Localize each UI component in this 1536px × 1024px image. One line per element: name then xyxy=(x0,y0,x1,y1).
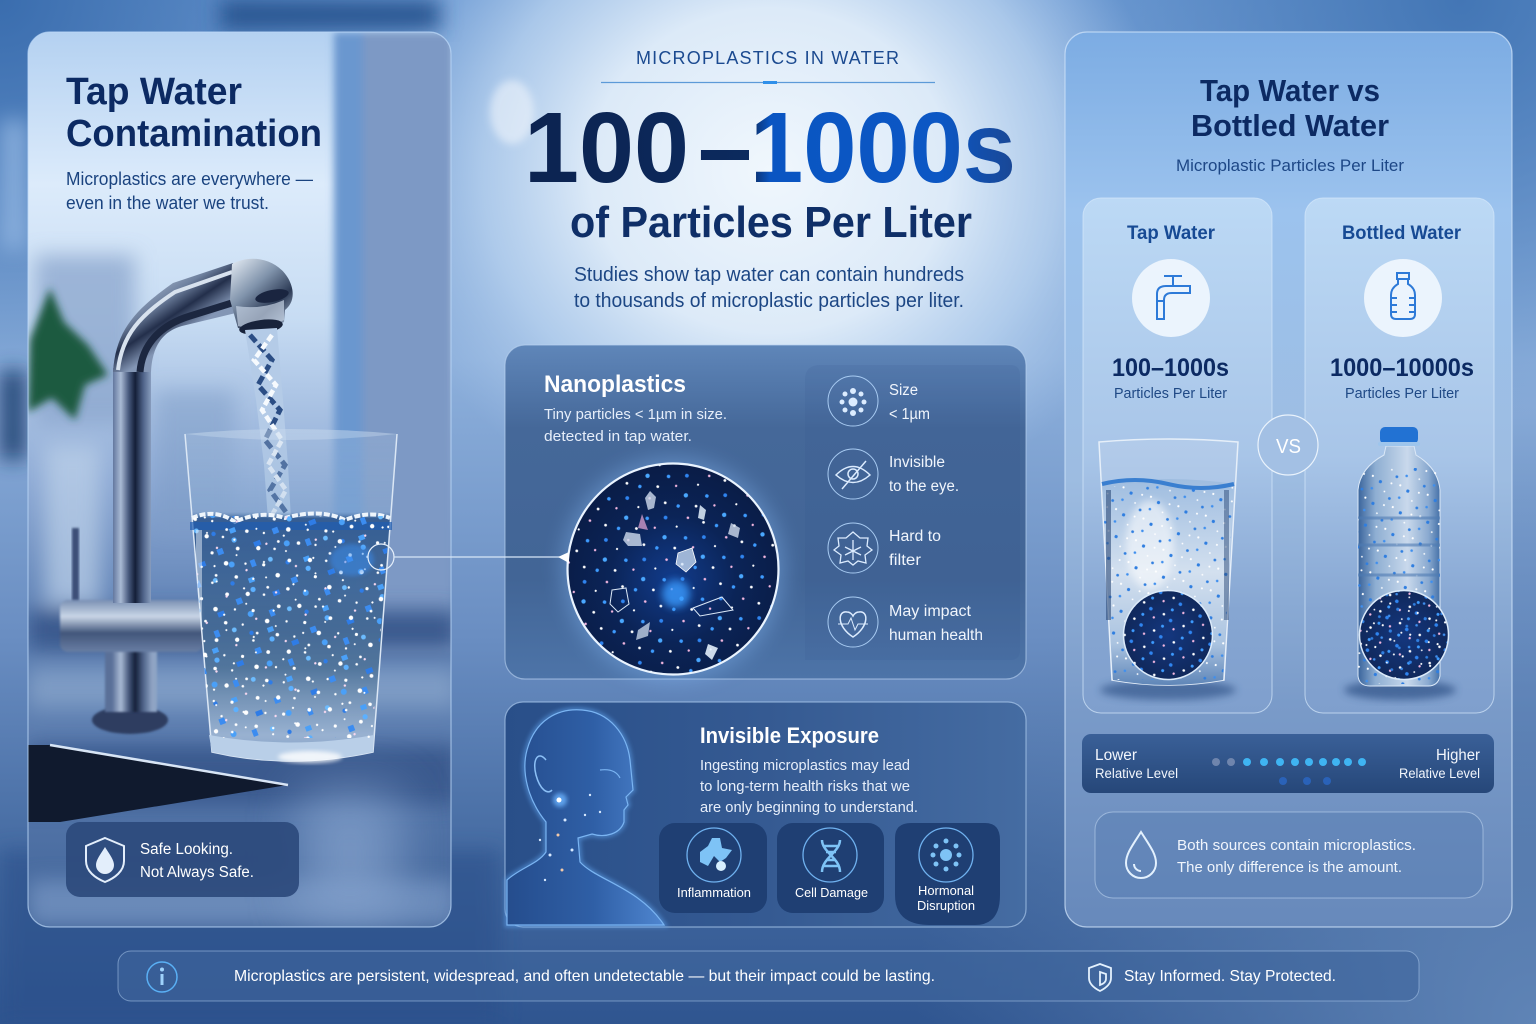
icon: tap xyxy=(1132,259,1210,337)
human head figure xyxy=(507,710,664,925)
intro text: to thousands of microplastic particles per liter. xyxy=(574,290,964,312)
card: inflammation xyxy=(659,823,767,913)
heading: Invisible Exposure xyxy=(700,723,879,748)
higher label xyxy=(1399,747,1480,781)
glass illustration xyxy=(1099,439,1238,700)
faucet xyxy=(60,259,293,734)
intro text xyxy=(574,264,964,312)
card: tap water xyxy=(1083,198,1272,713)
footer tagline: Stay Informed. Stay Protected. xyxy=(1124,968,1336,985)
lower label: Lower xyxy=(1095,747,1137,764)
icon: filter xyxy=(828,523,878,573)
VS badge xyxy=(1258,415,1318,475)
card: bottled water xyxy=(1305,198,1494,713)
label: invisible: to the eye. xyxy=(889,478,959,495)
label: size: Size xyxy=(889,382,918,399)
heading: Tap Water vs xyxy=(1200,73,1380,108)
icon: drop xyxy=(1126,832,1156,878)
kitchen photo scene xyxy=(28,32,458,926)
headline number xyxy=(524,92,1016,204)
description: detected in tap water. xyxy=(544,428,692,445)
icon: shield with drop xyxy=(86,838,124,882)
sink xyxy=(28,745,288,822)
card: bottled water: 1000–10000s xyxy=(1330,354,1474,382)
card: bottled water: Particles Per Liter xyxy=(1345,386,1459,402)
card: tap water: 100–1000s xyxy=(1112,354,1229,382)
note: both sources xyxy=(1095,812,1483,898)
description xyxy=(544,406,727,445)
subheading: Microplastics are everywhere — xyxy=(66,169,313,189)
card: bottled water: Bottled Water xyxy=(1342,223,1462,244)
subheading: even in the water we trust. xyxy=(66,193,269,213)
heading: Bottled Water xyxy=(1191,108,1389,143)
eyebrow: MICROPLASTICS IN WATER xyxy=(636,48,899,68)
note text: The only difference is the amount. xyxy=(1177,859,1402,876)
badge text: Safe Looking. xyxy=(140,841,233,858)
heading: Nanoplastics xyxy=(544,371,686,398)
label: may impact: human health xyxy=(889,627,983,644)
headline number: 100 xyxy=(524,92,689,204)
label: hard to filter: filter xyxy=(889,552,921,569)
card: cell damage: Cell Damage xyxy=(795,885,868,900)
level dots xyxy=(1212,758,1366,785)
card: inflammation: Inflammation xyxy=(677,885,751,900)
badge text: Not Always Safe. xyxy=(140,864,254,881)
card: tap water: Particles Per Liter xyxy=(1114,386,1227,402)
subheading: Microplastic Particles Per Liter xyxy=(1176,156,1404,175)
label: hard to filter xyxy=(889,528,941,569)
bottle illustration xyxy=(1344,427,1456,700)
footer bar xyxy=(118,951,1419,1001)
water stream xyxy=(245,328,291,520)
panel: tap water contamination xyxy=(28,32,458,927)
magnified particles circle xyxy=(560,457,786,681)
note text xyxy=(1177,837,1416,876)
feature list panel xyxy=(805,365,1020,660)
badge text xyxy=(140,841,254,881)
label: size xyxy=(889,382,930,423)
panel: tap vs bottled xyxy=(1065,32,1512,927)
description xyxy=(700,758,918,816)
label: size: < 1µm xyxy=(889,406,930,423)
headline unit: of Particles Per Liter xyxy=(570,198,972,247)
card: hormonal disruption: Hormonal xyxy=(918,883,974,898)
VS badge: VS xyxy=(1276,436,1301,458)
connector from glass to magnified circle xyxy=(368,544,569,570)
plant xyxy=(28,288,108,420)
heading: Contamination xyxy=(66,113,322,155)
main glass with particles xyxy=(185,429,397,763)
title block xyxy=(524,48,1016,312)
headline number: 1000s xyxy=(750,92,1016,204)
card: tap water: Tap Water xyxy=(1127,223,1216,244)
label: may impact: May impact xyxy=(889,603,972,620)
heading: Tap Water xyxy=(66,71,242,113)
lower label: Relative Level xyxy=(1095,766,1178,781)
icon: heart xyxy=(828,597,878,647)
icon: bottle xyxy=(1364,259,1442,337)
label: may impact xyxy=(889,603,983,644)
description: Ingesting microplastics may lead xyxy=(700,758,910,774)
note text: Both sources contain microplastics. xyxy=(1177,837,1416,854)
headline number: – xyxy=(698,92,752,204)
higher label: Relative Level xyxy=(1399,766,1480,781)
description: to long-term health risks that we xyxy=(700,779,910,795)
description: are only beginning to understand. xyxy=(700,800,918,816)
lower label xyxy=(1095,747,1178,781)
badge: safe looking xyxy=(66,822,299,897)
icon: crossed eye xyxy=(828,449,878,499)
heading xyxy=(66,71,322,155)
icon: shield xyxy=(1089,964,1111,991)
heading xyxy=(1191,73,1389,143)
panel: nanoplastics xyxy=(505,345,1026,681)
higher label: Higher xyxy=(1436,747,1480,764)
panel: invisible exposure xyxy=(505,702,1026,927)
card: hormonal disruption: Disruption xyxy=(917,898,975,913)
card: hormonal disruption xyxy=(895,823,1000,925)
card: cell damage xyxy=(777,823,884,913)
subheading xyxy=(66,169,313,213)
relative level scale xyxy=(1082,734,1494,793)
description: Tiny particles < 1µm in size. xyxy=(544,406,727,423)
intro text: Studies show tap water can contain hundreds xyxy=(574,264,964,286)
icon: size dots xyxy=(828,376,878,426)
footer message: Microplastics are persistent, widespread, and often undetectable — but their impact could be lasting. xyxy=(234,968,935,985)
icon: info xyxy=(147,962,177,992)
label: invisible xyxy=(889,454,959,495)
label: hard to filter: Hard to xyxy=(889,528,941,545)
label: invisible: Invisible xyxy=(889,454,945,471)
